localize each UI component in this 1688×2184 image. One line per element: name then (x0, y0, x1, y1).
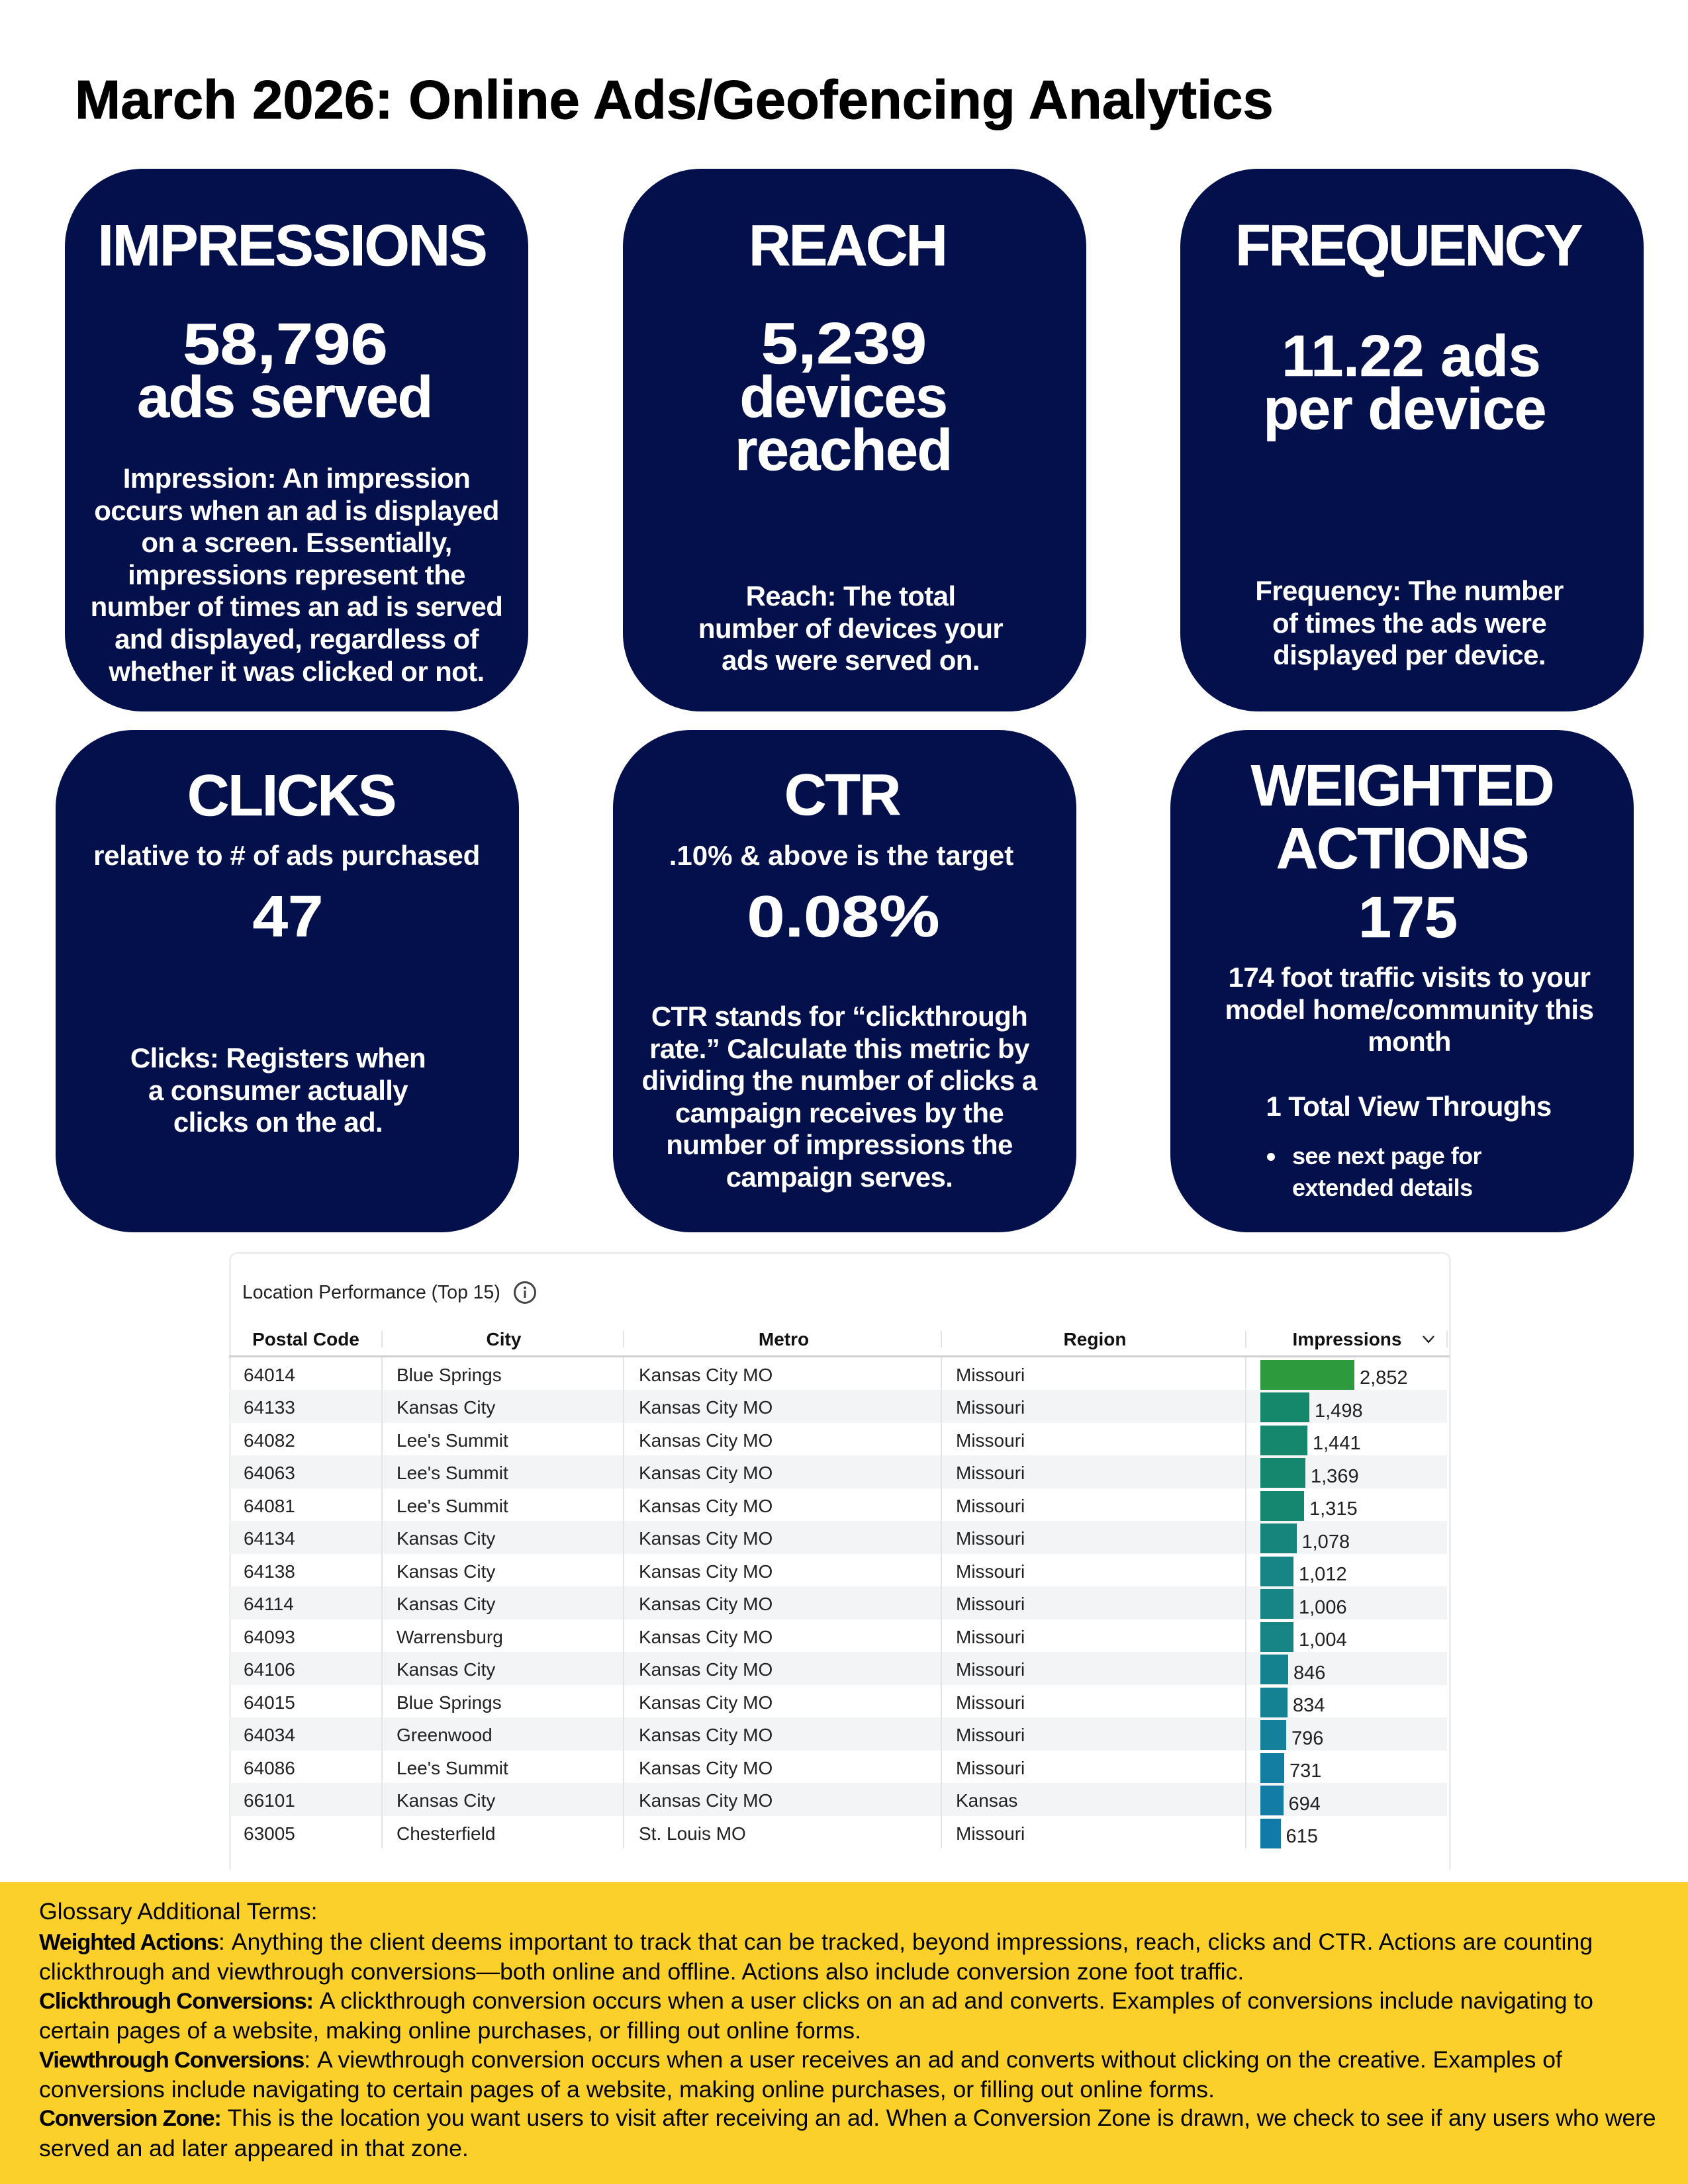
row 64081 (244, 1491, 1358, 1521)
text: clicks definition: Clicks: Registers when (130, 1042, 426, 1073)
row 64082 (244, 1426, 1361, 1455)
row 64034: Kansas City MO (639, 1725, 773, 1745)
text: see next page note (1292, 1142, 1481, 1201)
row 64106: Kansas City (397, 1659, 495, 1680)
text: clicks definition: a consumer actually (148, 1075, 408, 1106)
term: weighted actions (39, 1929, 1593, 1985)
row 64063: Missouri (956, 1463, 1025, 1483)
bar: 1,012 (1260, 1557, 1293, 1586)
row 64014: Missouri (956, 1365, 1025, 1385)
row 64093: 64093 (244, 1627, 295, 1647)
stat: clicks count: 47 (253, 884, 323, 949)
row 64086 (244, 1753, 1321, 1783)
panel: frequency (1180, 169, 1644, 711)
text: ctr definition: campaign receives by the (675, 1097, 1004, 1128)
row 64082: 64082 (244, 1430, 295, 1451)
text: foot traffic visits: month (1368, 1026, 1451, 1057)
row 64015: Blue Springs (397, 1692, 502, 1713)
stat: ads served count: 58,796 (183, 311, 388, 377)
heading: clicks: CLICKS (187, 762, 395, 828)
row 64086: 731 (1289, 1760, 1321, 1782)
heading: weighted actions (1251, 752, 1553, 881)
row 64081: Lee's Summit (397, 1496, 508, 1516)
row 64134: Missouri (956, 1528, 1025, 1549)
row 63005: 63005 (244, 1823, 295, 1844)
text: foot traffic visits (1225, 962, 1593, 1057)
column header: impressions: Impressions (1293, 1329, 1401, 1349)
bar: 796 (1260, 1720, 1286, 1750)
panel: weighted actions (1170, 730, 1634, 1232)
row 64114 (230, 1586, 1447, 1619)
bar: 834 (1260, 1688, 1288, 1717)
bar: 1,498 (1260, 1392, 1309, 1422)
panel: ctr (613, 730, 1076, 1232)
glossary heading: Glossary Additional Terms: (39, 1898, 318, 1925)
row 63005: 615 (1286, 1826, 1318, 1847)
row 64082: Missouri (956, 1430, 1025, 1451)
row 64015: Kansas City MO (639, 1692, 773, 1713)
text: clicks definition: clicks on the ad. (173, 1107, 383, 1138)
row 64081: Kansas City MO (639, 1496, 773, 1516)
row 64093: Kansas City MO (639, 1627, 773, 1647)
row 64063 (230, 1455, 1447, 1488)
row 66101: Kansas City (397, 1790, 495, 1811)
row 64082: 1,441 (1313, 1433, 1361, 1454)
row 64014: Blue Springs (397, 1365, 502, 1385)
heading: weighted actions: ACTIONS (1276, 815, 1528, 881)
term: clickthrough conversions (39, 1987, 1593, 2044)
bar: 615 (1260, 1819, 1280, 1848)
row 64106 (230, 1652, 1447, 1685)
column header: city: City (487, 1329, 521, 1349)
text: reach definition: number of devices your (698, 613, 1003, 644)
row 64034: 796 (1291, 1727, 1323, 1749)
stat: ctr value: 0.08% (747, 884, 939, 949)
row 64133 (230, 1390, 1447, 1423)
row 64034: Missouri (956, 1725, 1025, 1745)
row 63005: St. Louis MO (639, 1823, 746, 1844)
bar: 1,369 (1260, 1458, 1305, 1488)
row 64114: Missouri (956, 1594, 1025, 1614)
text: foot traffic visits: 174 foot traffic visits to your (1229, 962, 1590, 993)
text: impression definition: Impression: An impression (123, 463, 470, 494)
row 64014: Kansas City MO (639, 1365, 773, 1385)
title: March 2026: Online Ads/Geofencing Analytics (75, 69, 1274, 130)
row 66101: Kansas (956, 1790, 1017, 1811)
row 64133: Missouri (956, 1397, 1025, 1418)
stat label: per device: per device (1263, 376, 1546, 441)
row 64093: 1,004 (1299, 1629, 1347, 1651)
row 64134: 64134 (244, 1528, 295, 1549)
text: impression definition: whether it was clicked or not. (109, 656, 485, 687)
row 64063: Kansas City MO (639, 1463, 773, 1483)
term: viewthrough conversions (39, 2046, 1562, 2103)
text: reach definition (698, 580, 1004, 676)
term: conversion zone: Conversion Zone: This is the location you want users to visit after receiving an ad. When a Conversion Zone is drawn, we check to see if any users who were (39, 2105, 1656, 2131)
row 64015: 64015 (244, 1692, 295, 1713)
row 64133: 1,498 (1315, 1400, 1363, 1422)
row 64106: Missouri (956, 1659, 1025, 1680)
text: ctr definition: number of impressions the (666, 1129, 1013, 1160)
row 64034 (230, 1717, 1447, 1750)
stat label: devices reached (735, 364, 952, 482)
row 64093 (244, 1622, 1347, 1652)
row 64081: 1,315 (1309, 1498, 1358, 1520)
panel: impressions (65, 169, 528, 711)
text: total view throughs: 1 Total View Throughs (1266, 1091, 1552, 1122)
row 66101: 694 (1288, 1794, 1321, 1815)
text: foot traffic visits: model home/community this (1225, 994, 1593, 1025)
heading: ctr: CTR (784, 762, 900, 827)
stat: weighted actions count: 175 (1358, 884, 1458, 950)
bar: 1,004 (1260, 1621, 1293, 1652)
row 64086: Lee's Summit (397, 1758, 508, 1778)
panel: location performance table (229, 1252, 1451, 1870)
text: clicks definition (130, 1042, 426, 1138)
text: frequency definition: of times the ads were (1272, 608, 1546, 639)
term: weighted actions: Weighted Actions: Anything the client deems important to track that can be tracked, beyond impressions, reach, clicks and CTR. Actions are counting (39, 1929, 1593, 1955)
term: viewthrough conversions: Viewthrough Conversions: A viewthrough conversion occurs when a user receives an ad and converts without clicking on the creative. Examples of (39, 2046, 1562, 2073)
row 64106: 846 (1293, 1662, 1325, 1684)
stat: ads per device value: 11.22 ads (1282, 323, 1541, 388)
row 64034: Greenwood (397, 1725, 492, 1745)
text: impression definition: number of times an ad is served (91, 591, 502, 622)
text: impression definition: and displayed, regardless of (115, 623, 479, 655)
bar: 694 (1260, 1786, 1283, 1815)
row 64081: 64081 (244, 1496, 295, 1516)
row 63005: Missouri (956, 1823, 1025, 1844)
row 64138 (244, 1557, 1347, 1586)
row 64086: 64086 (244, 1758, 295, 1778)
row 64134: Kansas City (397, 1528, 495, 1549)
row 64086: Missouri (956, 1758, 1025, 1778)
text: ctr definition: rate.” Calculate this metric by (649, 1033, 1029, 1064)
heading: weighted actions: WEIGHTED (1251, 752, 1553, 818)
row 64138: 1,012 (1299, 1564, 1347, 1585)
row 63005: Chesterfield (397, 1823, 495, 1844)
row 64034: 64034 (244, 1725, 295, 1745)
panel: reach (623, 169, 1086, 711)
icon: sort chevron (1423, 1336, 1434, 1343)
text: ctr definition (642, 1001, 1038, 1193)
heading: reach: REACH (749, 212, 946, 278)
row 64114: Kansas City (397, 1594, 495, 1614)
row 64082: Lee's Summit (397, 1430, 508, 1451)
row 64138: Kansas City (397, 1561, 495, 1582)
text: reach definition: ads were served on. (722, 645, 980, 676)
term: viewthrough conversions: conversions include navigating to certain pages of a website, making online purchases, or filling out online forms. (39, 2076, 1215, 2103)
row 64014 (244, 1360, 1408, 1390)
row 64081: Missouri (956, 1496, 1025, 1516)
row 64082: Kansas City MO (639, 1430, 773, 1451)
row 64106: 64106 (244, 1659, 295, 1680)
row 64134 (230, 1521, 1447, 1554)
bar: 2,852 (1260, 1359, 1354, 1390)
text: see next page note: extended details (1292, 1174, 1472, 1201)
column header: region: Region (1064, 1329, 1126, 1349)
text: impression definition: on a screen. Essentially, (141, 527, 452, 558)
text: frequency definition (1255, 575, 1564, 670)
term: weighted actions: clickthrough and viewthrough conversions—both online and offline. Actions also include conversion zone foot traffic. (39, 1958, 1244, 1985)
text: ctr definition: CTR stands for “clickthrough (651, 1001, 1027, 1032)
text: ctr definition: campaign serves. (726, 1161, 953, 1193)
row 64093: Warrensburg (397, 1627, 503, 1647)
bar: 1,078 (1260, 1524, 1296, 1553)
row 63005 (244, 1819, 1318, 1848)
stat label: ads served: ads served (137, 364, 432, 429)
bar: 846 (1260, 1655, 1288, 1684)
row 64134: Kansas City MO (639, 1528, 773, 1549)
bar: 1,315 (1260, 1490, 1304, 1521)
stat: devices count: 5,239 (761, 310, 927, 376)
table title: Location Performance (Top 15) (242, 1282, 500, 1303)
subheading: ctr target: .10% & above is the target (669, 840, 1013, 871)
text: impression definition: impressions represent the (128, 559, 465, 590)
row 64114: Kansas City MO (639, 1594, 773, 1614)
row 64015: Missouri (956, 1692, 1025, 1713)
panel: glossary (0, 1882, 1688, 2184)
term: conversion zone: served an ad later appeared in that zone. (39, 2135, 469, 2161)
bullet dot (1267, 1153, 1275, 1161)
row 66101: Kansas City MO (639, 1790, 773, 1811)
column header: metro: Metro (759, 1329, 809, 1349)
row 64114: 64114 (244, 1594, 294, 1614)
text: frequency definition: Frequency: The number (1255, 575, 1564, 606)
row 64093: Missouri (956, 1627, 1025, 1647)
text: ctr definition: dividing the number of clicks a (642, 1065, 1037, 1096)
row 64106: Kansas City MO (639, 1659, 773, 1680)
term: clickthrough conversions: Clickthrough Conversions: A clickthrough conversion occurs when a user clicks on an ad and converts. Examples of conversions include navigating to (39, 1987, 1593, 2014)
row 66101: 66101 (244, 1790, 295, 1811)
row 64015: 834 (1293, 1695, 1325, 1716)
heading: frequency: FREQUENCY (1235, 212, 1581, 278)
row 64138: Missouri (956, 1561, 1025, 1582)
text: reach definition: Reach: The total (746, 580, 955, 612)
panel: clicks (56, 730, 519, 1232)
row 64063: 64063 (244, 1463, 295, 1483)
column header: postal code: Postal Code (252, 1329, 359, 1349)
row 64086: Kansas City MO (639, 1758, 773, 1778)
row 64014: 2,852 (1360, 1367, 1408, 1388)
row 64133: Kansas City MO (639, 1397, 773, 1418)
text: frequency definition: displayed per device. (1273, 639, 1546, 670)
row 66101 (230, 1783, 1447, 1816)
row 64133: 64133 (244, 1397, 295, 1418)
text: impression definition (91, 463, 502, 687)
row 64114: 1,006 (1299, 1596, 1347, 1617)
bar: 731 (1260, 1752, 1284, 1783)
row 64015 (244, 1688, 1325, 1717)
bar: 1,441 (1260, 1426, 1307, 1455)
term: clickthrough conversions: certain pages of a website, making online purchases, or filling out online forms. (39, 2017, 861, 2044)
term: conversion zone (39, 2105, 1656, 2161)
row 64014: 64014 (244, 1365, 295, 1385)
row 64134: 1,078 (1301, 1531, 1350, 1553)
row 64138: 64138 (244, 1561, 295, 1582)
heading: impressions: IMPRESSIONS (97, 212, 487, 278)
bar: 1,006 (1260, 1589, 1293, 1619)
stat label: devices reached: devices (739, 364, 947, 429)
row 64138: Kansas City MO (639, 1561, 773, 1582)
row 64063: 1,369 (1311, 1465, 1359, 1486)
icon: info (514, 1281, 536, 1304)
row 64063: Lee's Summit (397, 1463, 508, 1483)
row 64133: Kansas City (397, 1397, 495, 1418)
stat label: devices reached: reached (735, 417, 952, 482)
text: impression definition: occurs when an ad is displayed (94, 495, 499, 526)
subheading: clicks note: relative to # of ads purchased (93, 840, 480, 871)
text: see next page note: see next page for (1292, 1142, 1481, 1169)
